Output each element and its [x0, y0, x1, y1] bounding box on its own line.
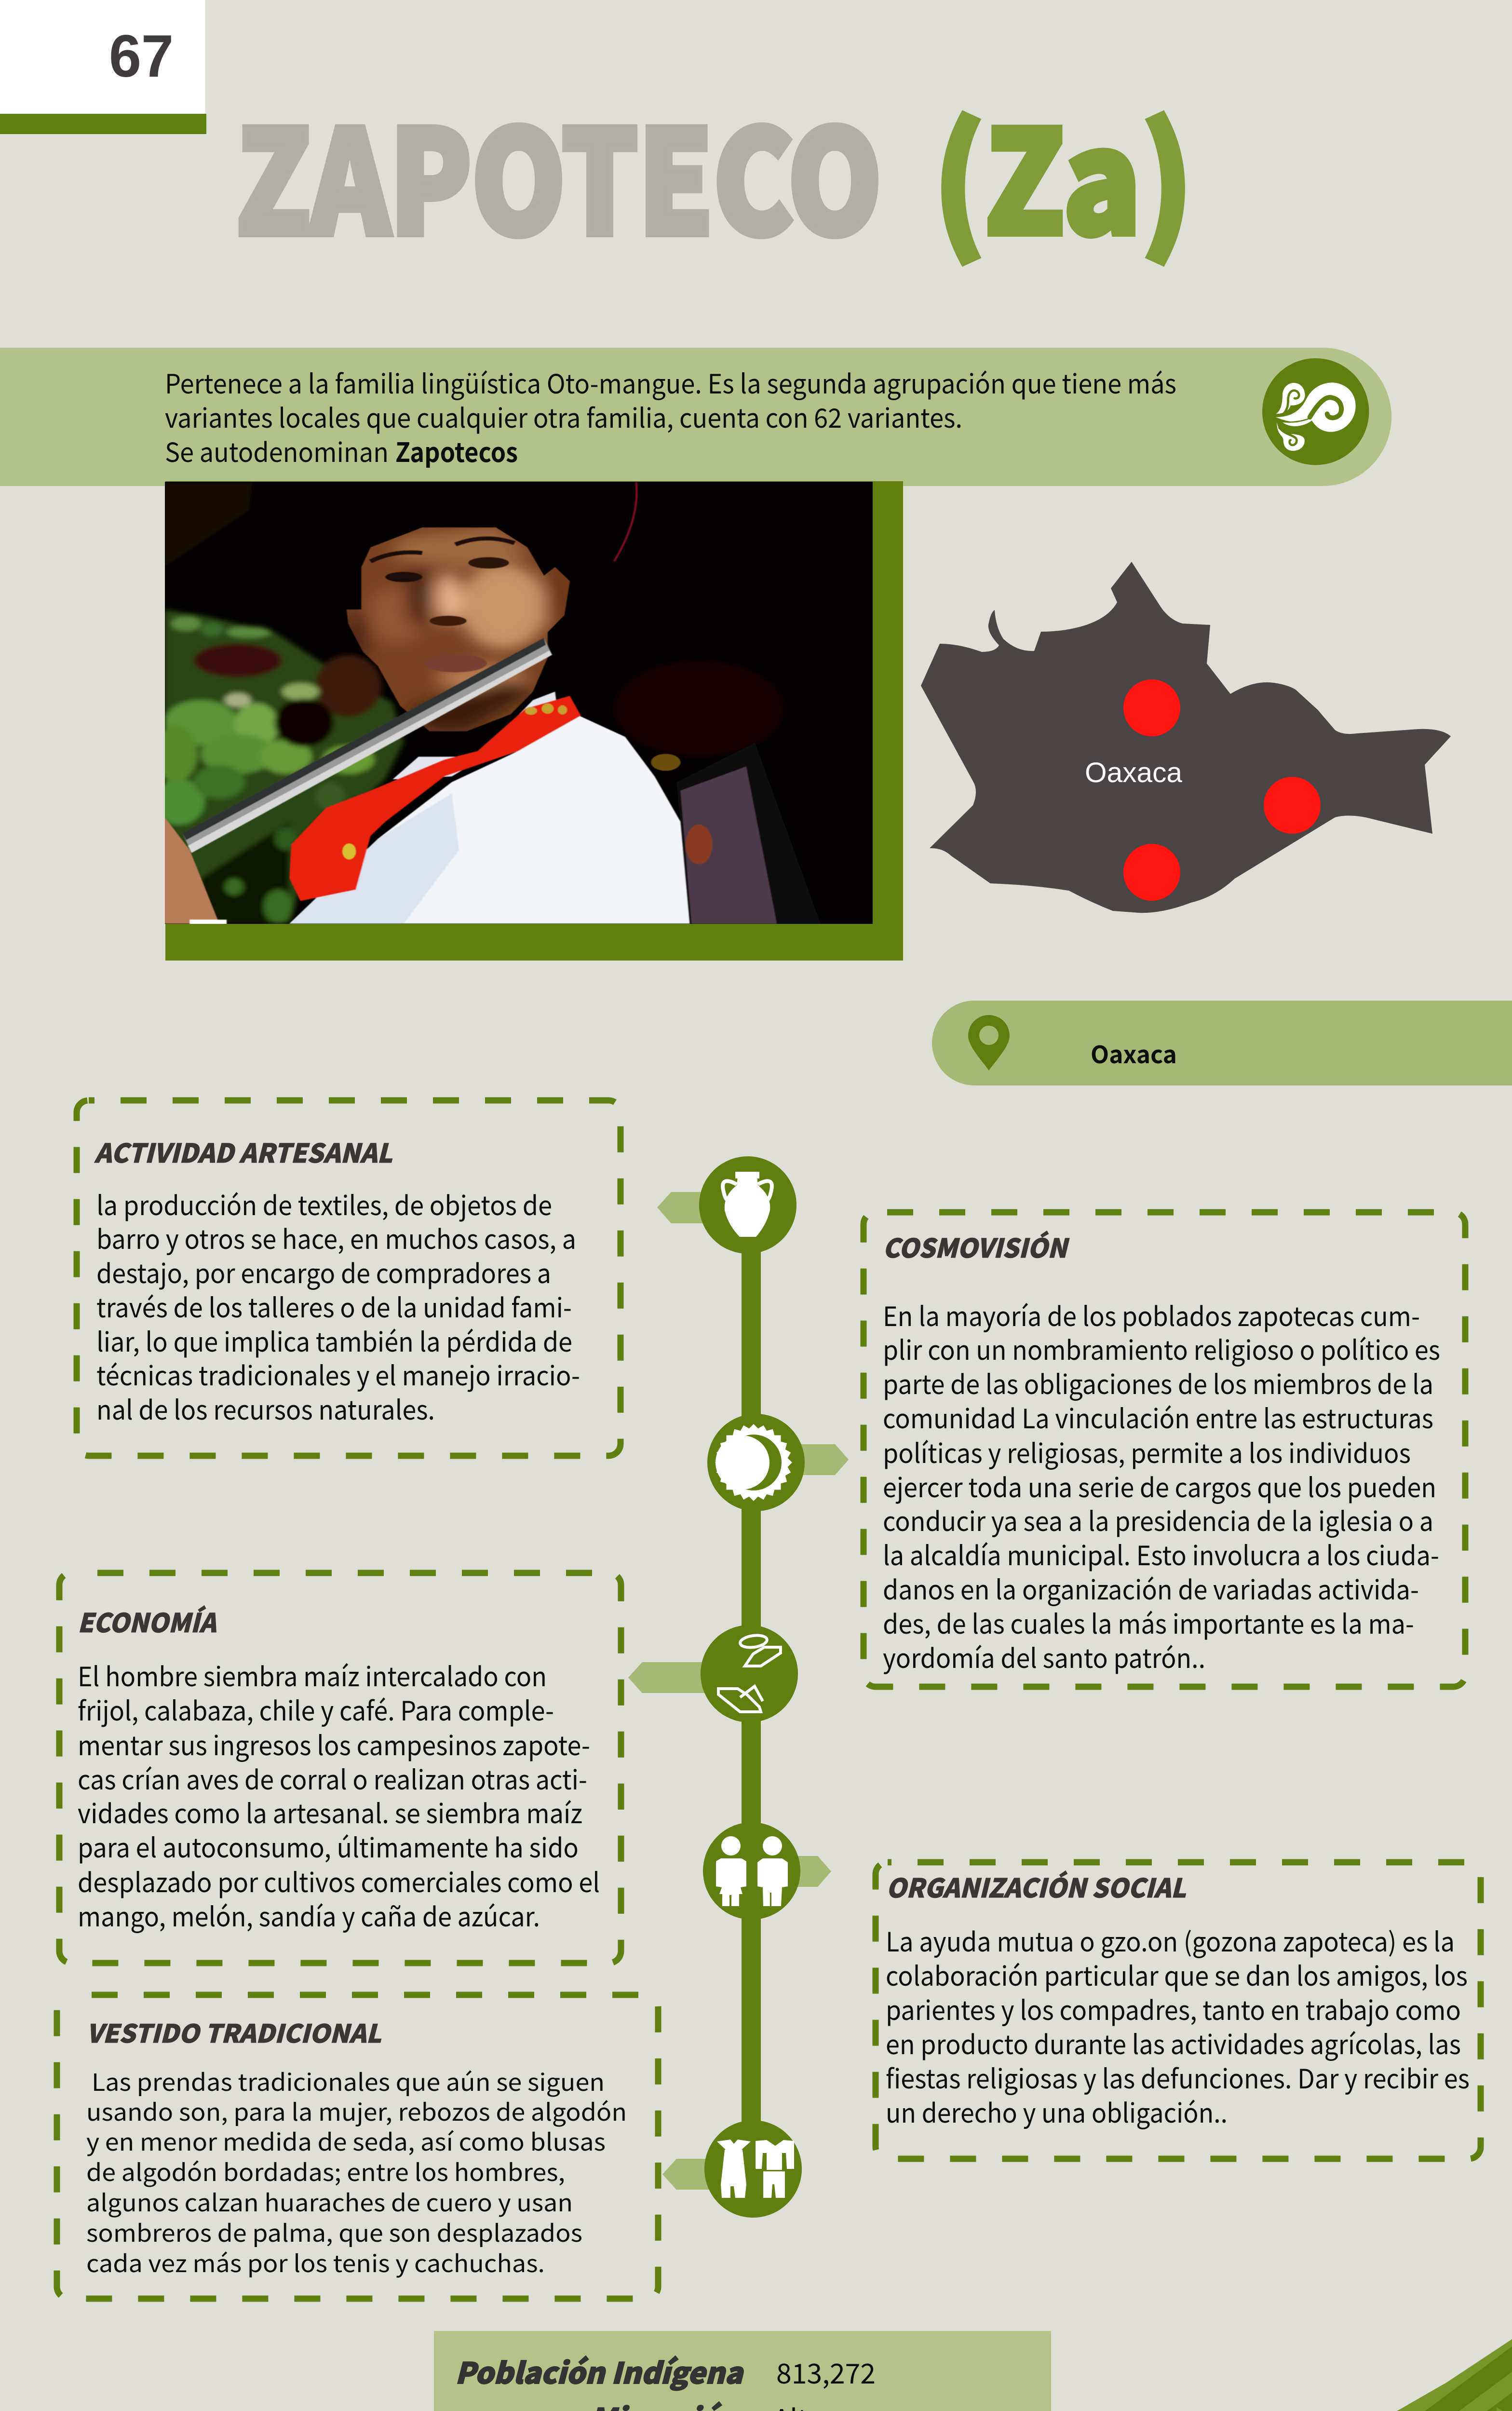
panel: intro band [0, 348, 1391, 486]
heading: VESTIDO TRADICIONAL [86, 2014, 381, 2050]
intro text [165, 363, 1176, 470]
body text: través de los talleres o de la unidad fami- [96, 1287, 572, 1325]
intro text: variantes locales que cualquier otra familia, cuenta con 62 variantes. [165, 397, 962, 435]
panel: cosmovision [864, 1212, 1465, 1687]
heading: ACTIVIDAD ARTESANAL [94, 1132, 392, 1170]
body text: parientes y los compadres, tanto en trabajo como [886, 1989, 1461, 2028]
body text [883, 1295, 1440, 1676]
body text: ejercer toda una serie de cargos que los pueden [883, 1466, 1436, 1505]
body text: sombreros de palma, que son desplazados [86, 2215, 582, 2249]
location name: Oaxaca [1091, 1036, 1177, 1070]
body text: El hombre siembra maíz intercalado con [78, 1655, 547, 1694]
icon: sun and moon [707, 1414, 805, 1511]
body text: en producto durante las actividades agrícolas, las [886, 2023, 1461, 2062]
body text: técnicas tradicionales y el manejo irracio- [96, 1354, 580, 1393]
body text: En la mayoría de los poblados zapotecas cum- [883, 1295, 1420, 1334]
body text: mentar sus ingresos los campesinos zapote- [78, 1724, 590, 1763]
timeline [628, 1156, 849, 2218]
stat: poblacion indigena: 813,272 [776, 2352, 876, 2392]
intro text: Se autodenominan [165, 431, 389, 470]
timeline arrow: artesanal [657, 1192, 714, 1223]
heading: ECONOMÍA [78, 1602, 216, 1640]
stat: migracion [590, 2396, 823, 2411]
icon: location pin [968, 1015, 1010, 1070]
panel: economia [59, 1573, 621, 1963]
body text: conducir ya sea a la presidencia de la iglesia o a [883, 1500, 1433, 1539]
body text: la alcaldía municipal. Esto involucra a los ciuda- [883, 1534, 1439, 1573]
body text: liar, lo que implica también la pérdida de [96, 1321, 572, 1359]
body text: comunidad La vinculación entre las estructuras [883, 1397, 1433, 1436]
body text: usando son, para la mujer, rebozos de algodón [86, 2094, 627, 2128]
body text: frijol, calabaza, chile y café. Para comple- [78, 1690, 554, 1728]
body text [86, 2064, 627, 2279]
intro text: Zapotecos [395, 431, 518, 470]
map: Oaxaca [921, 562, 1451, 913]
body text: desplazado por cultivos comerciales como el [78, 1861, 600, 1900]
timeline arrow: organizacion [796, 1856, 831, 1887]
body text [96, 1184, 580, 1427]
panel: organizacion social [876, 1862, 1481, 2159]
map label: Oaxaca [1085, 757, 1183, 788]
icon: traditional clothes [704, 2120, 802, 2218]
body text: y en menor medida de seda, así como blusas [86, 2124, 606, 2158]
bottom woven pattern band [0, 2329, 1512, 2411]
timeline arrow: vestido [662, 2159, 718, 2190]
stat: poblacion indigena: Población Indígena [455, 2350, 744, 2392]
body text: cas crían aves de corral o realizan otras acti- [78, 1759, 587, 1797]
body text: danos en la organización de variadas activida- [883, 1569, 1419, 1607]
body text: vidades como la artesanal. se siembra maíz [78, 1792, 582, 1831]
body text: des, de las cuales la más importante es la ma- [883, 1603, 1414, 1641]
panel: actividad artesanal [77, 1100, 621, 1456]
heading: COSMOVISIÓN [883, 1227, 1070, 1265]
icon: clay jar [699, 1156, 796, 1254]
map marker [1264, 777, 1321, 834]
body text: para el autoconsumo, últimamente ha sido [78, 1827, 579, 1865]
body text: barro y otros se hace, en muchos casos, a [96, 1218, 576, 1257]
number tab [0, 0, 206, 134]
heading: ORGANIZACIÓN SOCIAL [886, 1867, 1186, 1905]
timeline arrow: cosmovision [800, 1444, 849, 1475]
body text: nal de los recursos naturales. [96, 1389, 435, 1427]
photo: flute player [153, 482, 873, 924]
body text: mango, melón, sandía y caña de azúcar. [78, 1896, 540, 1934]
panel: vestido tradicional [57, 1995, 658, 2299]
body text: destajo, por encargo de compradores a [96, 1252, 551, 1291]
body text: algunos calzan huaraches de cuero y usan [86, 2184, 573, 2219]
body text: yordomía del santo patrón.. [883, 1637, 1205, 1676]
body text: un derecho y una obligación.. [886, 2092, 1228, 2130]
title: (Za) [933, 69, 1193, 275]
number tab: 67 [109, 23, 174, 90]
body text: la producción de textiles, de objetos de [96, 1184, 552, 1223]
timeline arrow: economia [628, 1662, 714, 1693]
panel: statistics [434, 2331, 1051, 2411]
stat: poblacion indigena [455, 2350, 876, 2392]
body text: políticas y religiosas, permite a los individuos [883, 1432, 1411, 1471]
body text: La ayuda mutua o gzo.on (gozona zapoteca) es la [886, 1921, 1455, 1959]
map marker [1123, 844, 1180, 901]
body text [886, 1921, 1470, 2130]
body text [78, 1655, 600, 1934]
intro text: Pertenece a la familia lingüística Oto-mangue. Es la segunda agrupación que tiene más [165, 363, 1176, 401]
title: ZAPOTECO [237, 69, 882, 275]
icon: wind swirl [1262, 358, 1369, 465]
map marker [1123, 679, 1180, 736]
location pill [932, 1001, 1512, 1085]
body text: fiestas religiosas y las defunciones. Dar y recibir es [886, 2058, 1470, 2096]
body text: parte de las obligaciones de los miembros de la [883, 1363, 1433, 1402]
body text: plir con un nombramiento religioso o político es [883, 1329, 1440, 1368]
body text: de algodón bordadas; entre los hombres, [86, 2154, 565, 2188]
body text: cada vez más por los tenis y cachuchas. [86, 2245, 545, 2279]
icon: two people [703, 1822, 800, 1920]
icon: hands and seed [701, 1625, 798, 1722]
body text: colaboración particular que se dan los amigos, los [886, 1955, 1468, 1993]
body text: Las prendas tradicionales que aún se siguen [92, 2064, 605, 2098]
panel: photo with green frame [153, 481, 903, 961]
